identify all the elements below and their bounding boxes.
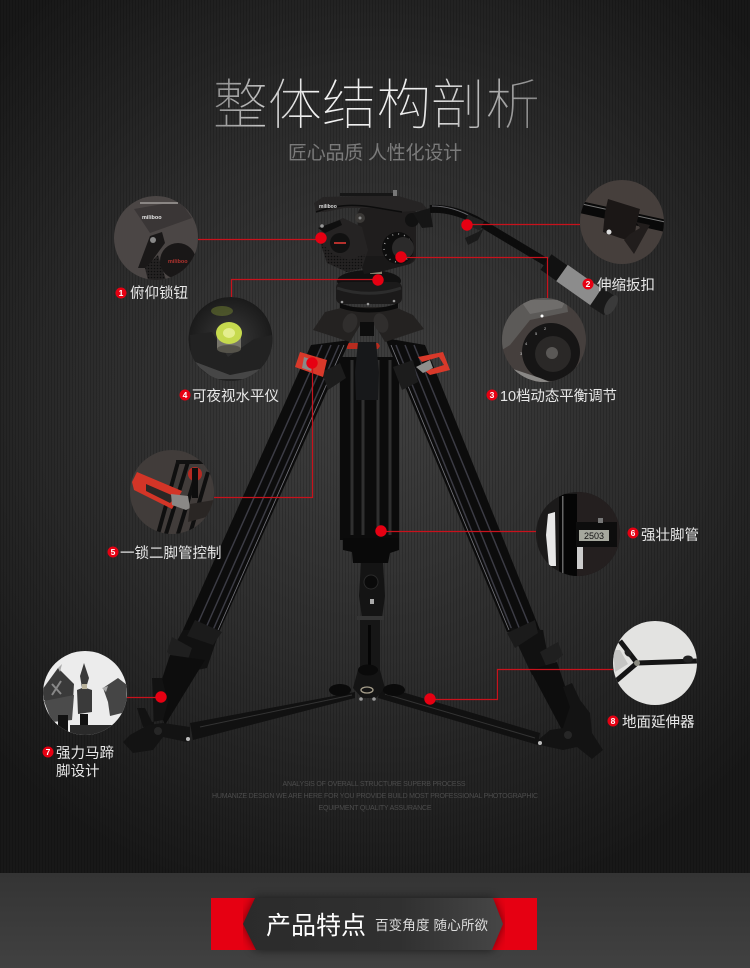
label 4: 可夜视水平仪 [192, 388, 279, 405]
label 8: 8 [611, 716, 616, 726]
label 7 [42, 745, 114, 780]
label 7: 7 [46, 747, 51, 757]
inset 3: balance dial: 3 [520, 351, 523, 356]
ground spreaders [190, 664, 540, 745]
right foot [538, 683, 603, 759]
english caption [212, 781, 538, 812]
left clamp red [295, 352, 346, 390]
label 7: 强力马蹄 [56, 745, 114, 762]
label 4: 4 [183, 390, 188, 400]
english caption: EQUIPMENT QUALITY ASSURANCE [318, 805, 432, 812]
inset 7: hoof feet [42, 651, 127, 735]
ball base [336, 267, 402, 312]
callout dots [155, 219, 473, 705]
inset 6: thick leg tube [536, 492, 620, 576]
center handle [355, 342, 379, 400]
bottom band [0, 873, 750, 968]
inset 1: tilt lock: miliboo [142, 215, 162, 221]
right leg [385, 338, 577, 730]
label 3: 3 [490, 390, 495, 400]
center column [340, 357, 399, 672]
inset 3: balance dial: 4 [525, 341, 528, 346]
inset 2: telescoping lever [580, 180, 666, 264]
tripod [123, 190, 621, 759]
spider hub [313, 307, 424, 342]
label 1: 1 [119, 288, 124, 298]
inset 5: one lock two legs [130, 450, 214, 534]
fluid head [314, 190, 433, 274]
banner heading: 产品特点 [266, 912, 366, 940]
english caption: HUMANIZE DESIGN WE ARE HERE FOR YOU PROVIDE BUILD MOST PROFESSIONAL PHOTOGRAPHIC [212, 793, 538, 800]
banner [211, 898, 537, 950]
right clamp red [393, 352, 450, 390]
label 8: 地面延伸器 [622, 714, 695, 731]
inset 6: thick leg tube: 2503 [584, 531, 604, 541]
inset 3: balance dial: 2 [544, 326, 547, 331]
label 7: 脚设计 [56, 763, 100, 780]
left leg [155, 340, 350, 725]
inset 1: tilt lock: miliboo [168, 259, 188, 265]
left foot [123, 678, 190, 753]
banner subheading: 百变角度 随心所欲 [375, 918, 488, 933]
english caption: ANALYSIS OF OVERALL STRUCTURE SUPERB PROCESS [282, 781, 466, 788]
label 2: 伸缩扳扣 [597, 277, 655, 294]
label 6: 6 [631, 528, 636, 538]
inset 4: night-vision level [188, 297, 276, 381]
callout lines [127, 224, 613, 700]
label 1: 俯仰锁钮 [130, 285, 188, 302]
label 5: 一锁二脚管控制 [120, 545, 222, 562]
inset 8: ground spreader [613, 621, 697, 705]
inset 3: balance dial [502, 298, 586, 382]
label 5: 5 [111, 547, 116, 557]
inset 1: tilt lock [114, 196, 198, 280]
subtitle: 匠心品质 人性化设计 [288, 142, 462, 164]
title: 整体结构剖析 [213, 75, 540, 136]
inset 3: balance dial: 5 [535, 331, 538, 336]
red rear clip [347, 343, 380, 349]
fluid head: miliboo [319, 204, 337, 210]
label 6: 强壮脚管 [641, 527, 699, 544]
label 3: 10档动态平衡调节 [500, 388, 617, 405]
label 2: 2 [586, 279, 591, 289]
pan handle [430, 206, 621, 317]
